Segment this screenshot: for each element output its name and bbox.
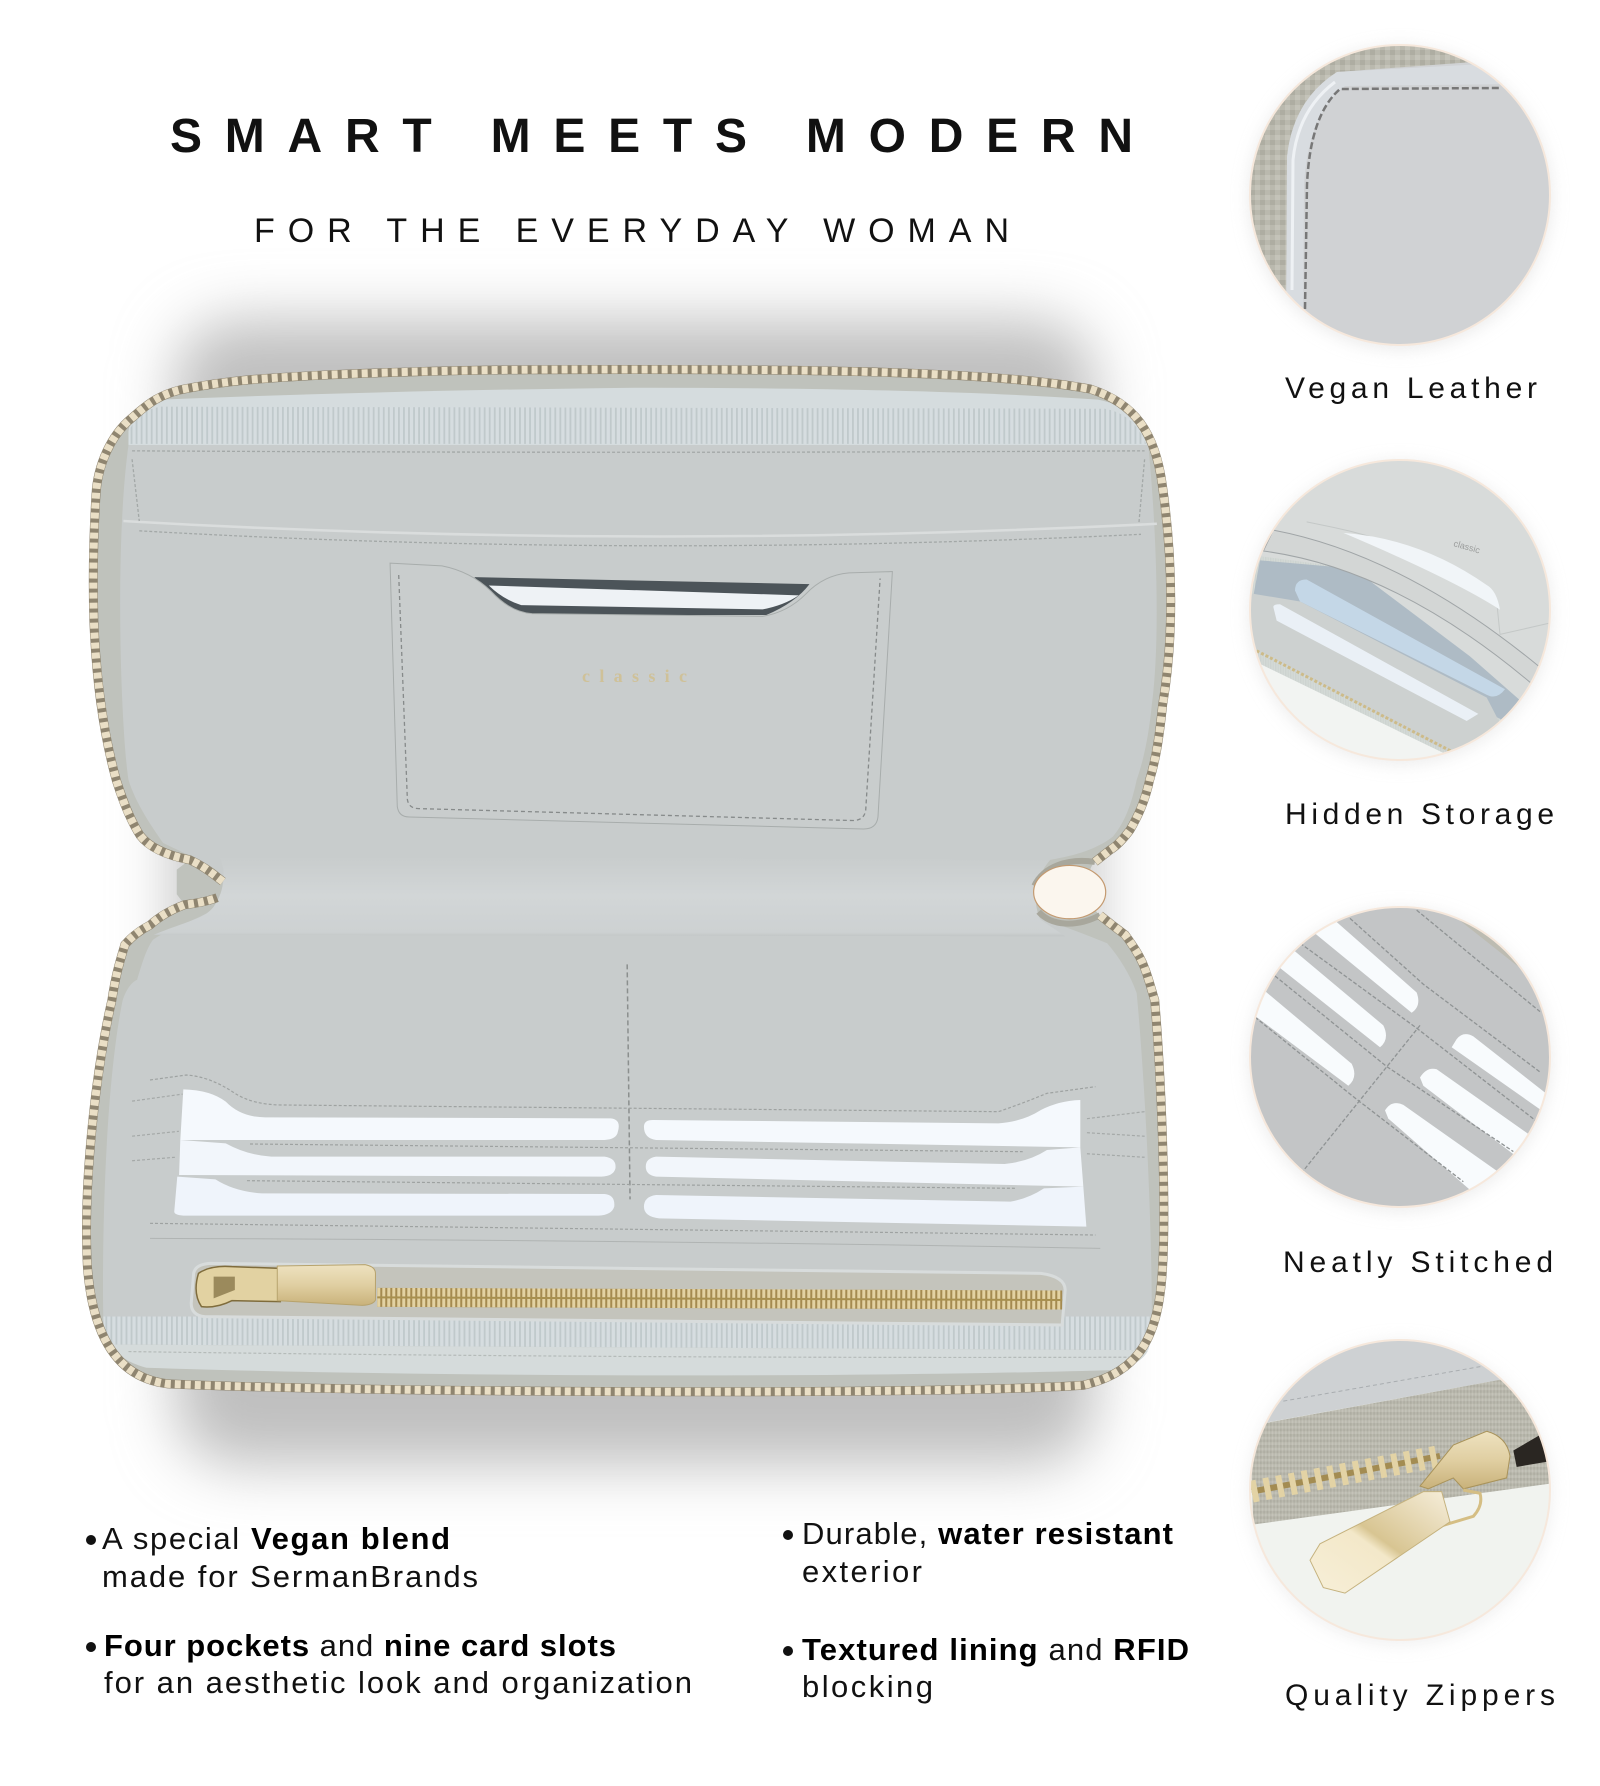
blue card bbox=[1295, 580, 1505, 697]
label: neatly stitched: Neatly Stitched bbox=[1283, 1246, 1553, 1279]
circle border bbox=[1250, 1340, 1550, 1640]
right notch opening bbox=[1034, 865, 1106, 919]
bullet: pockets and card slots bbox=[86, 1628, 692, 1700]
right notch woven rim bbox=[1034, 861, 1100, 924]
zip teeth bbox=[377, 1297, 1062, 1300]
lower pocket bbox=[1250, 593, 1500, 755]
fold band bbox=[154, 856, 1065, 936]
card row two right bbox=[646, 1147, 1083, 1187]
card row two left bbox=[179, 1140, 616, 1177]
upper panel bbox=[1261, 461, 1549, 700]
stitching bbox=[1305, 88, 1500, 309]
wallet logo text: classic bbox=[582, 666, 687, 686]
leather stitching bbox=[1283, 1365, 1487, 1401]
detail: hidden storage bbox=[1250, 456, 1552, 766]
circle halo bbox=[1250, 1343, 1550, 1643]
bullet: lining and RFID: Textured lining and RFID bbox=[802, 1632, 1189, 1667]
card slot stitching bbox=[150, 1144, 1095, 1235]
zip pull bbox=[1310, 1492, 1450, 1593]
circle halo bbox=[1250, 910, 1550, 1210]
pale background corner bbox=[1262, 664, 1442, 759]
wallet body bbox=[87, 369, 1171, 1392]
card slot pocket stitching bbox=[150, 1075, 1095, 1112]
lining bbox=[1252, 556, 1500, 752]
leather close-up bbox=[1250, 45, 1550, 345]
blue slot bbox=[1253, 560, 1520, 722]
lower flat lining bbox=[110, 1345, 1148, 1375]
centre vertical stitching bbox=[627, 964, 630, 1199]
storage close-up bbox=[1250, 456, 1552, 766]
table surface bbox=[1250, 1335, 1552, 1645]
detail: quality zippers bbox=[1250, 1335, 1552, 1645]
lower ribbed lining bbox=[103, 1317, 1152, 1350]
wallet drop shadow bbox=[175, 320, 1095, 1465]
rim highlight bbox=[1292, 82, 1335, 290]
bullet: pockets and card slots: for an aesthetic look and organization bbox=[104, 1665, 692, 1700]
zipper tape bbox=[87, 369, 1171, 1392]
pocket band bbox=[1263, 530, 1540, 686]
inner card slit bbox=[474, 577, 809, 615]
bullet: lining and RFID bbox=[783, 1632, 1189, 1704]
tiny logo: classic bbox=[1452, 538, 1482, 556]
detail: neatly stitched bbox=[1248, 906, 1552, 1212]
title: SMART MEETS MODERN bbox=[170, 110, 1133, 163]
wallet photo bbox=[87, 369, 1171, 1392]
phone card peeking out bbox=[489, 586, 799, 609]
card row three right bbox=[644, 1187, 1086, 1227]
zip slider detail bbox=[214, 1277, 235, 1298]
bullet: lining and RFID: blocking bbox=[802, 1669, 933, 1704]
bullet: vegan blend bbox=[86, 1521, 478, 1594]
leather bbox=[1250, 905, 1552, 1212]
diagonal stitches bbox=[1255, 910, 1540, 1182]
zipper teeth outline bbox=[87, 369, 1171, 1392]
top leather bbox=[1268, 1341, 1500, 1422]
card holder stitching bbox=[399, 575, 880, 821]
card row three left bbox=[174, 1177, 614, 1216]
woven tape bbox=[1251, 46, 1468, 291]
zip pocket bbox=[191, 1263, 1065, 1325]
upper card pocket edge bbox=[1307, 522, 1548, 634]
bullet: vegan blend: made for SermanBrands bbox=[102, 1559, 478, 1594]
circle halo bbox=[1250, 463, 1550, 763]
top ribbed lining bbox=[128, 388, 1148, 445]
card in slit bbox=[1343, 533, 1500, 610]
bullet: water resistant: Durable, water resistant bbox=[802, 1516, 1173, 1551]
card row one right bbox=[644, 1100, 1080, 1147]
woven tape bbox=[1250, 1379, 1552, 1525]
white card stripes bbox=[1316, 922, 1418, 1013]
bullet: vegan blend: A special Vegan blend bbox=[102, 1521, 450, 1556]
card slots and zip pocket bbox=[150, 1075, 1100, 1325]
stitching close-up bbox=[1251, 908, 1549, 1206]
label: vegan leather: Vegan Leather bbox=[1285, 372, 1537, 405]
circle border bbox=[1250, 45, 1550, 345]
zipper tape corner bbox=[1461, 921, 1518, 966]
raised rim bbox=[1286, 65, 1499, 308]
top stitching bbox=[132, 451, 1145, 546]
detail: vegan leather bbox=[1250, 45, 1550, 348]
upper pocket seam bbox=[123, 521, 1157, 536]
rib texture top bbox=[128, 407, 1146, 444]
zipper close-up bbox=[1251, 1341, 1549, 1594]
slider bbox=[1420, 1431, 1510, 1489]
teeth bbox=[1252, 1456, 1440, 1492]
side pocket stitching bbox=[132, 1094, 1145, 1161]
zip ring bbox=[196, 1266, 280, 1307]
label: hidden storage: Hidden Storage bbox=[1285, 798, 1554, 831]
dark gap bbox=[1513, 1434, 1548, 1467]
card holder pocket bbox=[390, 563, 892, 829]
interior leather bbox=[103, 445, 1157, 1317]
bullet: pockets and card slots: Four pockets and nine card slots bbox=[104, 1628, 616, 1663]
circle border bbox=[1250, 907, 1550, 1207]
card row one left bbox=[180, 1089, 619, 1140]
white card bbox=[1273, 604, 1478, 721]
circle halo bbox=[1250, 48, 1550, 348]
subtitle: FOR THE EVERYDAY WOMAN bbox=[254, 212, 1009, 250]
pocket edge bbox=[150, 1238, 1100, 1248]
circle border bbox=[1250, 460, 1550, 760]
zipper bbox=[1257, 651, 1453, 752]
zip pull bbox=[277, 1265, 375, 1305]
ring bbox=[1437, 1490, 1481, 1527]
label: quality zippers: Quality Zippers bbox=[1285, 1679, 1555, 1712]
lower lining stitching bbox=[128, 1352, 1137, 1357]
bullet: water resistant bbox=[783, 1516, 1173, 1589]
bullet: water resistant: exterior bbox=[802, 1554, 922, 1589]
